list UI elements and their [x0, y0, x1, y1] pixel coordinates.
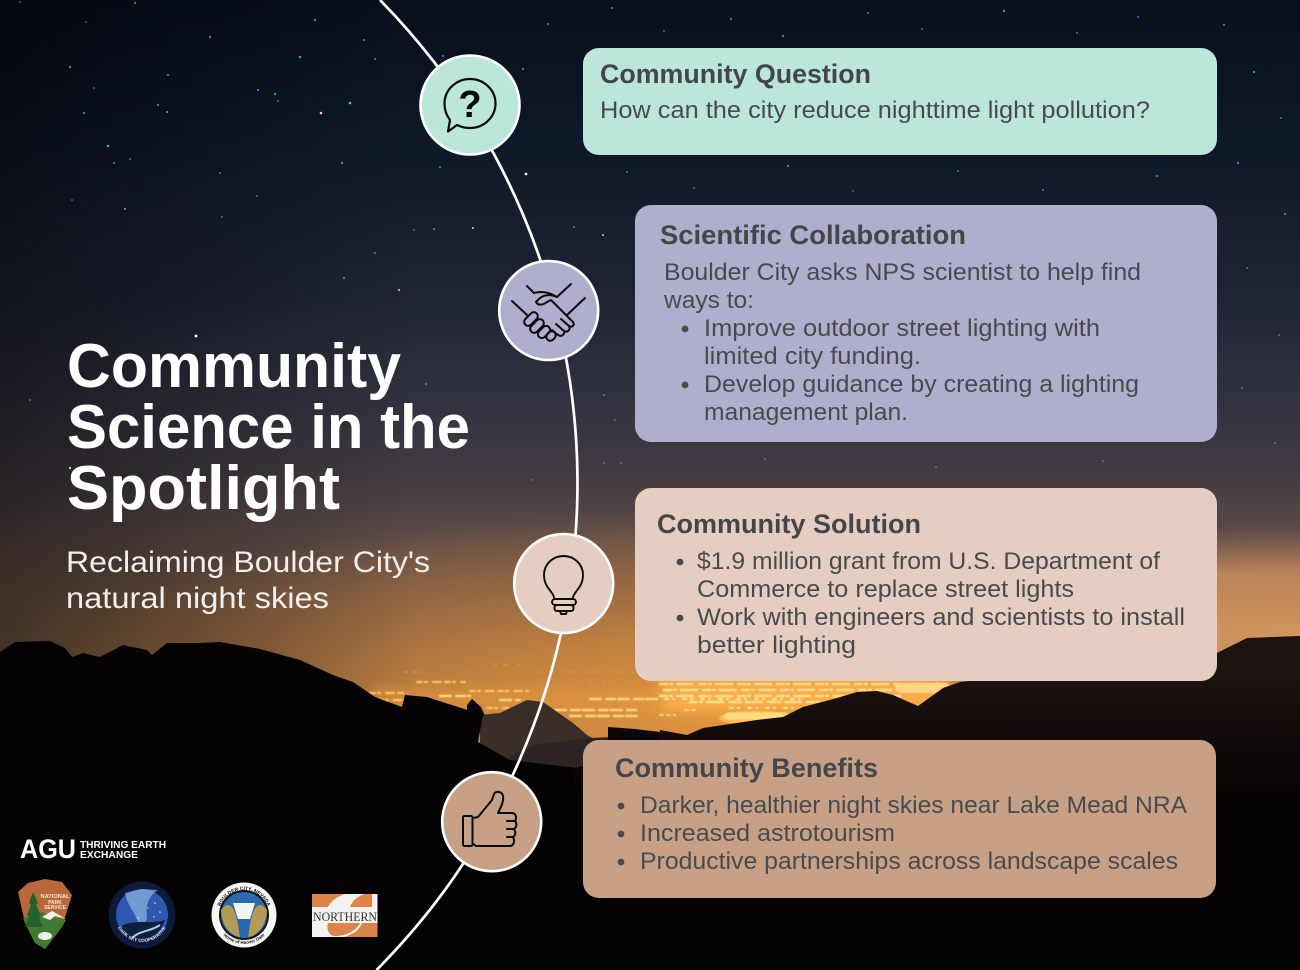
- logo: dark sky cooperative seal: DARK SKY COOPERATIVE: [118, 926, 166, 942]
- logo: AGU Thriving Earth Exchange: THRIVING EARTH: [80, 839, 166, 851]
- logo: Boulder City seal: [212, 882, 276, 948]
- text: collaboration details: limited city funding.: [704, 343, 921, 370]
- heading: scientific collaboration: Scientific Collaboration: [660, 220, 966, 250]
- logo: Northern: [312, 894, 378, 937]
- icon: question speech bubble: [420, 56, 520, 154]
- text: solution list: [677, 548, 1185, 659]
- heading: community benefits: Community Benefits: [615, 753, 878, 783]
- heading: community solution: Community Solution: [657, 509, 921, 539]
- text: collaboration details: Boulder City asks NPS scientist to help find: [664, 259, 1141, 286]
- text: collaboration details: Develop guidance by creating a lighting: [704, 371, 1139, 398]
- text: collaboration details: Improve outdoor street lighting with: [704, 315, 1100, 342]
- logo: Boulder City seal: Home of Hoover Dam: [224, 933, 264, 944]
- text: benefits list: Darker, healthier night skies near Lake Mead NRA: [640, 792, 1187, 819]
- text: solution list: $1.9 million grant from U.S. Department of: [697, 548, 1160, 575]
- logo: AGU Thriving Earth Exchange: EXCHANGE: [80, 849, 138, 861]
- text: solution list: Work with engineers and scientists to install: [697, 604, 1185, 631]
- logo: AGU Thriving Earth Exchange: AGU: [20, 834, 76, 864]
- panel: community solution: [635, 488, 1217, 681]
- logo: National Park Service arrowhead: [18, 879, 72, 949]
- logo: AGU Thriving Earth Exchange: [20, 834, 166, 864]
- subtitle: natural night skies: [66, 582, 329, 615]
- title: [67, 332, 470, 523]
- text: question: How can the city reduce nighttime light pollution?: [600, 97, 1150, 124]
- text: solution list: Commerce to replace street lights: [697, 576, 1074, 603]
- title: Spotlight: [67, 454, 340, 523]
- city lights: [370, 665, 950, 725]
- logo: National Park Service arrowhead: SERVICE: [44, 905, 67, 911]
- mountain silhouettes: [0, 636, 1300, 970]
- panel: community benefits: [583, 740, 1216, 898]
- stars: [19, 1, 1286, 481]
- text: benefits list: Increased astrotourism: [640, 820, 895, 847]
- subtitle: [66, 546, 430, 615]
- panel: community question: [583, 48, 1217, 155]
- icon: handshake: [499, 261, 598, 360]
- title: Community: [67, 332, 402, 401]
- title: Science in the: [67, 393, 470, 462]
- logo: Boulder City seal: BOULDER CITY, NEVADA: [217, 886, 270, 906]
- logo: National Park Service arrowhead: NATIONAL: [40, 894, 70, 900]
- text: collaboration details: [663, 259, 1141, 426]
- icon: light bulb: [514, 534, 613, 633]
- heading: community question: Community Question: [600, 59, 871, 89]
- text: benefits list: Productive partnerships across landscape scales: [640, 848, 1178, 875]
- text: solution list: better lighting: [697, 632, 856, 659]
- text: benefits list: [618, 792, 1187, 875]
- panel: scientific collaboration: [635, 205, 1217, 442]
- icon: thumbs up: [442, 772, 541, 871]
- text: collaboration details: management plan.: [704, 399, 908, 426]
- logo: Northern: NORTHERN: [313, 909, 378, 924]
- logo: dark sky cooperative seal: [108, 882, 176, 948]
- icon: question speech bubble: ?: [458, 84, 482, 126]
- timeline curve: [376, 0, 577, 970]
- text: collaboration details: ways to:: [663, 287, 754, 314]
- logo: National Park Service arrowhead: PARK: [48, 900, 62, 906]
- subtitle: Reclaiming Boulder City's: [66, 546, 430, 579]
